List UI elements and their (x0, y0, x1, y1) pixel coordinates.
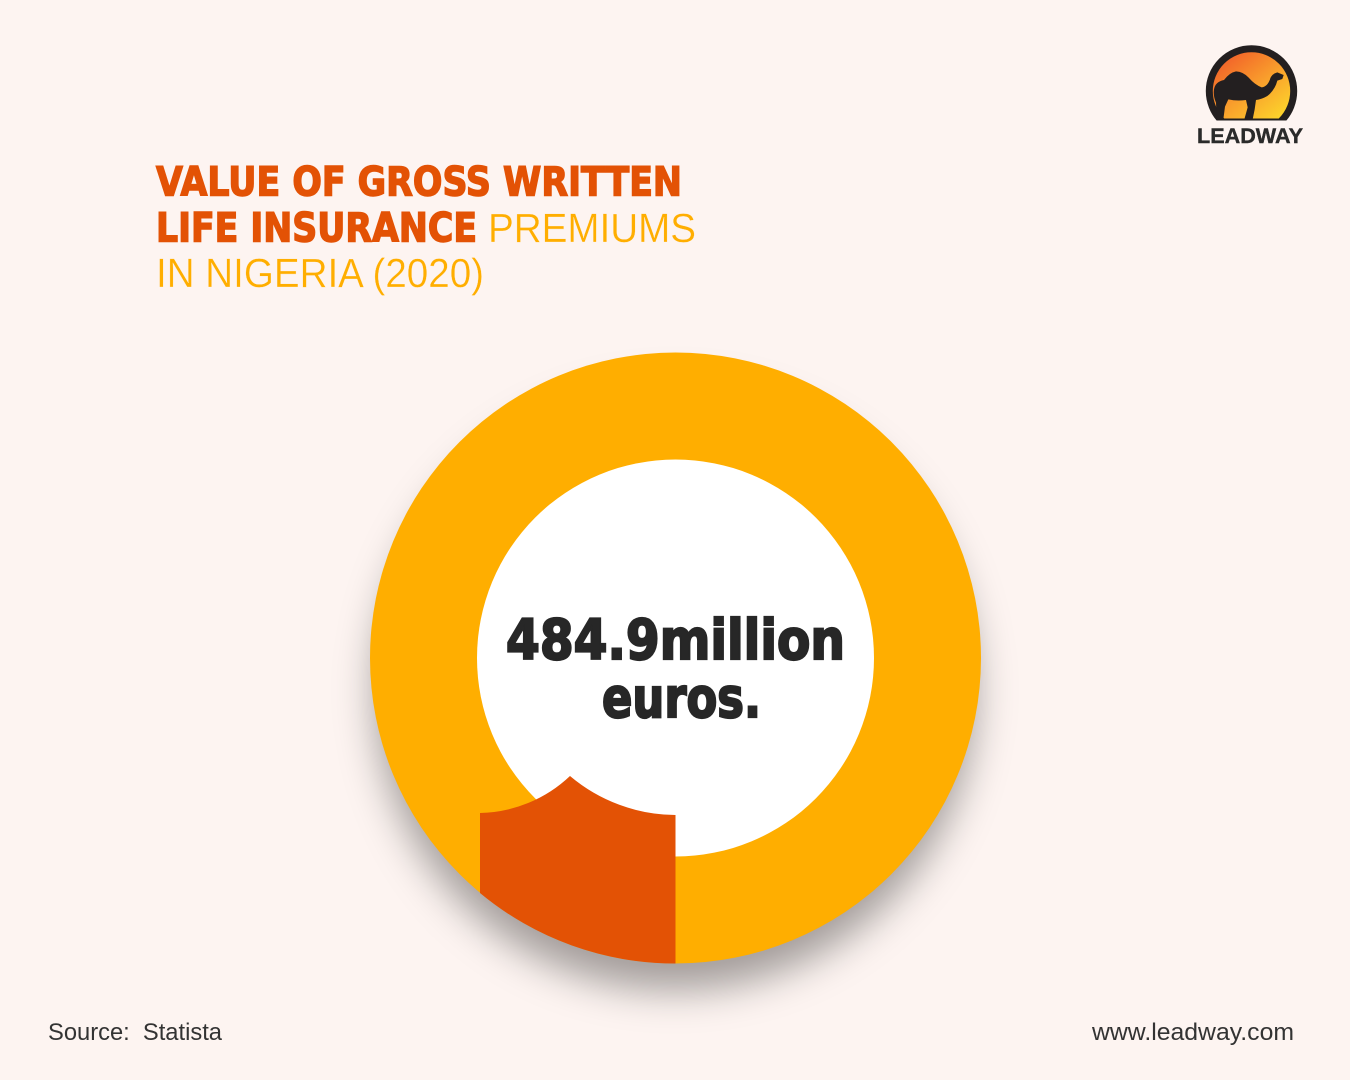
highlighted segment (480, 776, 676, 964)
donut hole (477, 460, 874, 856)
donut chart (370, 352, 981, 990)
central value (506, 608, 845, 730)
title line 2 bold: LIFE INSURANCE (156, 206, 477, 252)
logo wordmark: LEADWAY (1197, 125, 1303, 148)
logo: Leadway (1197, 49, 1303, 148)
donut ring (370, 352, 981, 964)
donut shadow (375, 390, 975, 990)
title (156, 160, 696, 296)
website url: www.leadway.com (1091, 1019, 1294, 1046)
icon: camel in sun (1209, 49, 1294, 133)
title line 2 light: PREMIUMS (488, 205, 696, 251)
value line 2: euros. (602, 666, 761, 730)
title line 3: IN NIGERIA (2020) (156, 250, 484, 296)
value line 1: 484.9million (506, 608, 845, 672)
title line 1: VALUE OF GROSS WRITTEN (156, 160, 682, 206)
source note: Source: Statista (48, 1019, 223, 1046)
